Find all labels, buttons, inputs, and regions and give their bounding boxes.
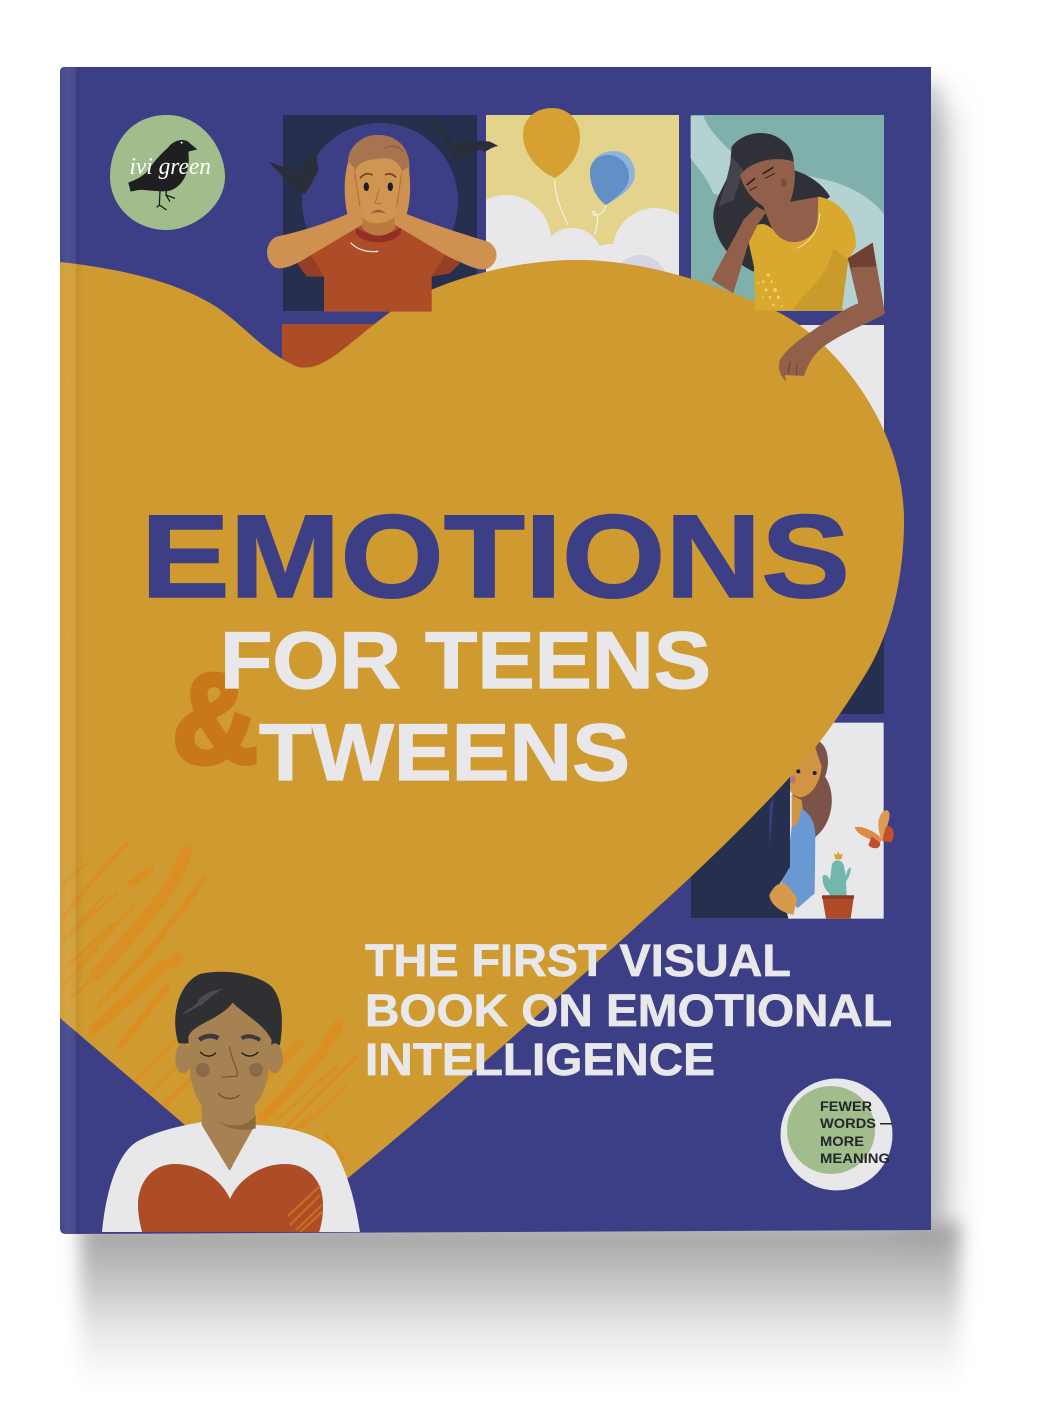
subtitle: INTELLIGENCE (365, 1034, 715, 1085)
title: for teens: FOR TEENS (220, 616, 711, 706)
shirt (102, 1122, 360, 1232)
woman's arm over the heart (779, 243, 885, 382)
heart shape (60, 260, 904, 1215)
title: emotions: EMOTIONS (141, 491, 850, 623)
drop shadow (80, 84, 960, 1387)
red heart on chest (138, 1164, 323, 1235)
calm boy with heart (102, 972, 360, 1235)
heart scribble texture (63, 843, 357, 1160)
shirt (310, 225, 448, 312)
face (188, 1003, 272, 1118)
face (354, 158, 402, 224)
panel: white window (800, 325, 884, 431)
hair (348, 135, 410, 175)
badge: fewer words more meaning: FEWER (820, 1099, 872, 1114)
sleeves (297, 255, 460, 277)
icon: blue balloon (590, 151, 635, 235)
badge: fewer words more meaning: MORE (820, 1134, 864, 1149)
logo: ivi green (110, 115, 225, 230)
panel: frightened boy (282, 115, 477, 374)
subtitle: BOOK ON EMOTIONAL (365, 985, 892, 1036)
book front (60, 66, 931, 1236)
icon: butterfly (855, 810, 894, 848)
icon: crow (128, 140, 197, 210)
icon: bats (268, 119, 498, 194)
badge: fewer words more meaning (780, 1078, 892, 1190)
panel: sad woman background (691, 115, 884, 311)
icon: yellow balloon (523, 108, 580, 225)
right hand and arm (394, 167, 497, 269)
ears (175, 1043, 191, 1073)
subtitle (365, 944, 891, 1076)
icon: cactus (822, 851, 854, 919)
title: ampersand: & (172, 648, 258, 791)
cover background (60, 66, 931, 1236)
panel: girl at the curtain (691, 723, 884, 919)
panel: sad woman figure (712, 133, 856, 311)
title: tweens: TWEENS (259, 708, 630, 798)
brows and eyes (199, 1036, 218, 1040)
neck (362, 216, 395, 236)
spine (60, 66, 84, 1236)
left hand and arm (267, 162, 363, 268)
hair (175, 972, 282, 1045)
badge: fewer words more meaning: WORDS (820, 1116, 876, 1131)
neck (202, 1105, 255, 1170)
logo wordmark: ivi green (129, 154, 211, 180)
panel: balloons (486, 115, 679, 276)
subtitle: THE FIRST VISUAL (365, 935, 791, 986)
badge: fewer words more meaning: MEANING (820, 1151, 890, 1166)
panel: frightened boy figure (267, 119, 498, 312)
panel: dark window (840, 636, 884, 714)
